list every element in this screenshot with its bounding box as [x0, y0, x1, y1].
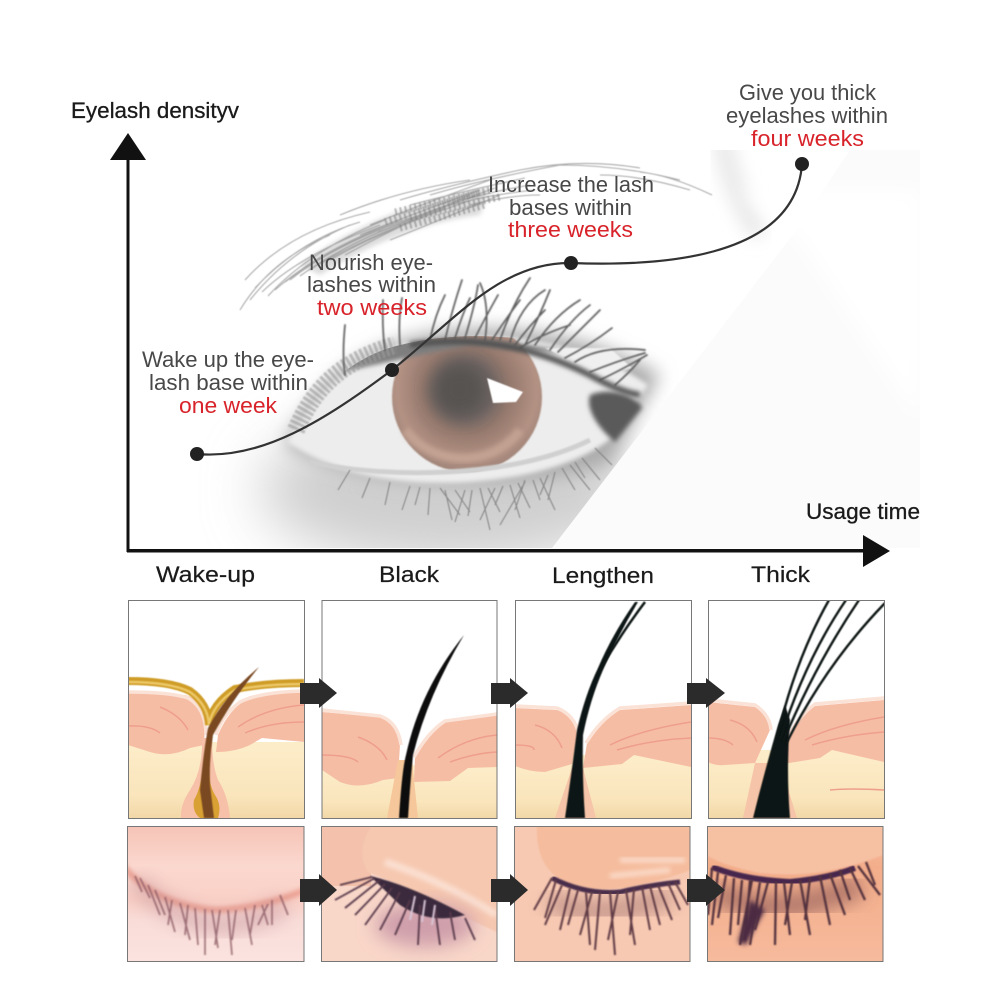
- hair: [200, 667, 259, 818]
- x axis with arrow: [127, 535, 890, 567]
- eye socket shadow: [285, 328, 660, 483]
- callout: one week: lash base within: [149, 370, 308, 395]
- pale skin band: [708, 698, 884, 740]
- eyelid crease highlight: [385, 862, 497, 915]
- callout: three weeks: bases within: [509, 195, 632, 220]
- eyebrow texture: [385, 190, 500, 228]
- lower lid rim: [310, 440, 590, 473]
- arrow: lower 2: [491, 874, 528, 906]
- arrow: upper 3: [687, 678, 725, 708]
- callout: four weeks: eyelashes within: [726, 103, 888, 128]
- arrow: upper 1: [300, 678, 337, 708]
- y axis with arrow: [110, 133, 146, 552]
- second strand: [600, 602, 645, 670]
- y axis label: Eyelash densityv: [71, 98, 239, 123]
- eyebrow: [240, 163, 712, 310]
- eye photograph background: [239, 150, 764, 548]
- face shading: [243, 428, 632, 548]
- photo: black lashes: [321, 826, 497, 961]
- eyelid crease: [122, 865, 310, 910]
- lashes: [335, 877, 475, 945]
- panel: lengthen follicle diagram: [515, 600, 691, 818]
- lid highlights: [610, 860, 685, 876]
- outer eye corner: [589, 392, 642, 442]
- skin lines: [708, 717, 884, 790]
- callout: one week: [142, 347, 314, 418]
- curve markers: [190, 157, 809, 461]
- callout: two weeks: [307, 250, 436, 320]
- lash highlights: [410, 896, 435, 925]
- pale skin band: [322, 710, 497, 757]
- callout: one week: one week: [179, 393, 278, 418]
- panel: black follicle diagram: [322, 635, 496, 818]
- hair wedge: [722, 135, 760, 235]
- pale skin band: [128, 691, 304, 735]
- arrow: upper 2: [491, 678, 528, 708]
- callout: three weeks: [488, 172, 654, 242]
- skin right: [414, 715, 497, 782]
- lashes: [708, 862, 880, 945]
- photo frame 3: [514, 826, 690, 962]
- skin lines: [322, 735, 497, 762]
- photo: wake-up lashes: [122, 826, 310, 961]
- stage labels: [156, 562, 811, 588]
- follicle: [555, 768, 596, 818]
- eyelid highlight: [546, 348, 632, 370]
- stage labels: Thick: [751, 562, 811, 587]
- dermis: [322, 765, 497, 818]
- skin left: [515, 708, 578, 772]
- hair: [565, 602, 638, 818]
- lash root band: [410, 341, 640, 395]
- lash line: [552, 878, 680, 892]
- pale skin band: [515, 703, 691, 743]
- lash haze: [135, 880, 285, 925]
- dark lash mass: [370, 876, 465, 918]
- panel frame 4: [708, 600, 884, 818]
- skin lines: [515, 722, 691, 750]
- callout: three weeks: Increase the lash: [488, 172, 654, 197]
- stage labels: Wake-up: [156, 562, 255, 587]
- panel frame 3: [516, 600, 692, 818]
- hair strands: [777, 600, 885, 744]
- clumped lash: [738, 900, 765, 945]
- callout: two weeks: lashes within: [307, 272, 436, 297]
- dermis: [128, 742, 304, 818]
- callout: four weeks: Give you thick: [739, 80, 877, 105]
- lash line: [712, 867, 855, 882]
- skin right: [216, 692, 304, 752]
- lash haze: [715, 885, 860, 906]
- lash haze: [550, 895, 670, 911]
- white upper right: [740, 190, 920, 420]
- skin right: [783, 700, 884, 764]
- callout: three weeks: three weeks: [508, 217, 633, 242]
- skin right: [583, 705, 691, 768]
- arrow: lower 1: [300, 874, 337, 906]
- lashes: [534, 878, 688, 955]
- eyelid: [707, 826, 883, 875]
- follicle: [743, 763, 797, 818]
- callout: four weeks: [726, 80, 888, 151]
- lashes: [135, 876, 288, 955]
- follicle: [181, 738, 230, 818]
- photo frame 1: [128, 826, 304, 962]
- light diagonal hair area: [552, 434, 649, 548]
- eyelid: [537, 826, 690, 889]
- gold band: [128, 681, 304, 725]
- callout: one week: Wake up the eye-: [142, 347, 314, 372]
- arrow: lower 3: [687, 874, 725, 906]
- stage labels: Lengthen: [552, 563, 654, 588]
- skin lines: [128, 705, 304, 733]
- callout: two weeks: Nourish eye-: [309, 250, 433, 275]
- dermis: [708, 750, 884, 818]
- eyeball: [287, 336, 648, 483]
- callout: two weeks: two weeks: [317, 295, 427, 320]
- panel frame 2: [322, 600, 497, 818]
- panel: wake-up follicle diagram: [129, 667, 304, 818]
- photo frame 2: [322, 826, 497, 962]
- lower lashes: [338, 448, 612, 530]
- x axis label: Usage time: [806, 499, 920, 524]
- skin left: [128, 693, 205, 754]
- panel frame 1: [128, 600, 304, 818]
- photo: lengthen lashes: [514, 826, 690, 961]
- hair bundle: [753, 705, 790, 818]
- lower eye shade: [375, 903, 475, 947]
- callout: four weeks: four weeks: [751, 126, 864, 151]
- stage labels: Black: [379, 562, 440, 587]
- follicle: [387, 760, 418, 818]
- hair: [399, 635, 464, 818]
- cheek left: [321, 826, 371, 886]
- photo frame 4: [708, 826, 883, 962]
- skin left: [322, 712, 400, 786]
- eyeshadow speckle: [296, 345, 395, 430]
- upper lashes: [344, 278, 647, 385]
- eyebrow core shading: [300, 188, 490, 275]
- dermis: [515, 755, 691, 818]
- growth curve: [197, 164, 802, 455]
- eyelid fold: [362, 826, 497, 932]
- photo: thick lashes: [707, 826, 883, 961]
- skin left: [708, 702, 770, 765]
- panel: thick follicle diagram: [708, 600, 885, 818]
- iris: [342, 336, 559, 472]
